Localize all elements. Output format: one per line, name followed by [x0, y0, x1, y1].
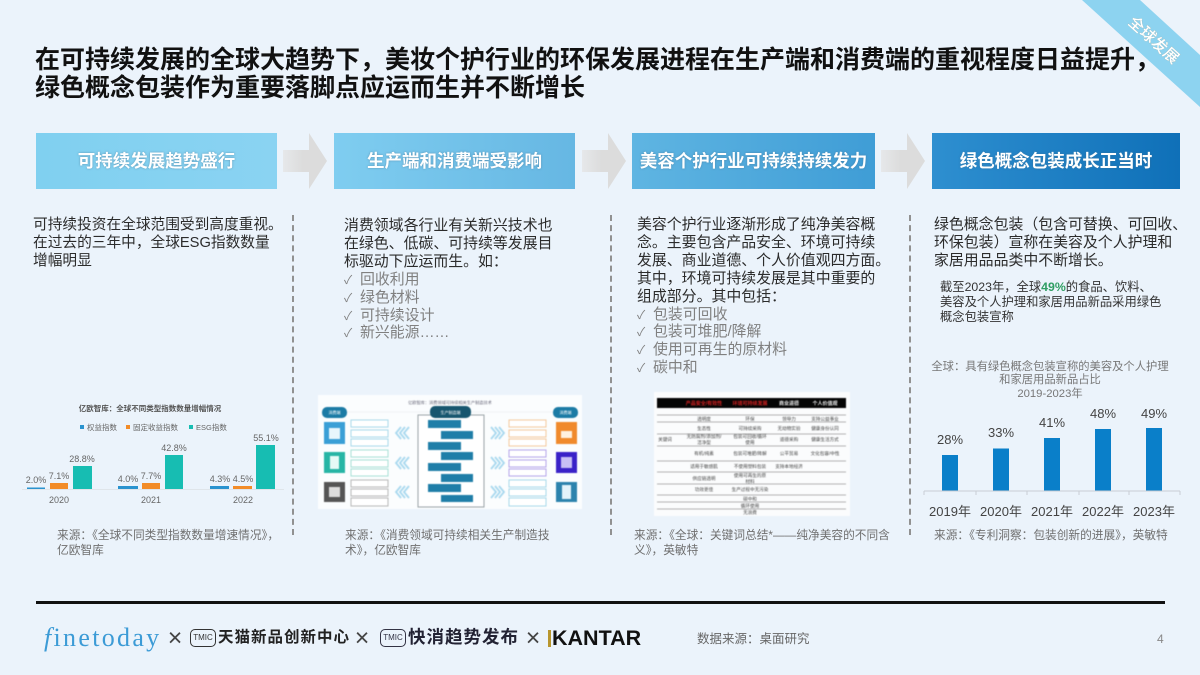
text: 49% [1141, 406, 1167, 421]
column 4 bar chart: 2020年 [980, 504, 1022, 519]
column 4 bar chart: 2019年 [929, 504, 971, 519]
column 1 chart: index growth: 4.3% [210, 474, 230, 484]
arrow 2 [582, 133, 626, 189]
column 4 highlight text: 美容及个人护理和家居用品新品采用绿色 [940, 295, 1161, 309]
column 2 diagram: 亿欧智库：消费领域可持续相关生产制造技术 [408, 399, 493, 406]
logo: TMIC new product center: TMIC [193, 633, 213, 642]
step header 2 [334, 133, 575, 189]
column 4 bar chart: 33% [988, 425, 1014, 440]
column 3 text: 碳中和 [653, 360, 698, 376]
logo text: 快消趋势发布: 快消趋势发布 [408, 627, 519, 647]
column 3 table: 个人价值观 [812, 400, 838, 407]
column 3 text: ✓ [637, 361, 645, 375]
column 1 chart: index growth: 7.7% [141, 471, 161, 481]
column 1 chart: index growth [22, 403, 284, 505]
column 4 source: 来源：《专利洞察：包装创新的进展》，英敏特 [934, 529, 1168, 542]
step header 4 [932, 133, 1180, 189]
separator x two: × [355, 624, 369, 652]
text: 48% [1090, 406, 1116, 421]
column 3 table: 公平贸易 [780, 450, 799, 457]
column 4 highlight text: 截至2023年，全球49%的食品、饮料、 [940, 280, 1152, 294]
title [35, 46, 1160, 102]
column 3 table: 循环使用 [741, 502, 760, 510]
right icons [556, 422, 577, 444]
column 3 text: ✓ [637, 308, 645, 322]
logo: TMIC fmcg [380, 629, 406, 647]
column 3 text: 发展、商业道德、个人价值观四方面。 [637, 253, 890, 269]
column 3 table: 生态性 [697, 425, 711, 432]
column 2 source: 术》，亿欧智库 [345, 544, 421, 556]
column 3 source: 义》，英敏特 [634, 544, 698, 556]
column 3 table: 功效更佳 [695, 486, 714, 493]
column 3 table: 可持续采购 [739, 425, 762, 432]
text: 41% [1039, 415, 1065, 430]
column 3 table: 包装可回收/循环 [733, 433, 767, 440]
corner ribbon: 全球发展 [1082, 0, 1200, 107]
column 3 text: 念。主要包含产品安全、环境可持续 [637, 235, 875, 251]
column 2 text: ✓ [344, 309, 352, 323]
logo: KANTAR: KANTAR [552, 626, 641, 650]
step header 1: 可持续发展趋势盛行 [78, 151, 235, 171]
column 1 chart: index growth: 2021 [141, 495, 161, 505]
column 1 text [33, 216, 283, 269]
column 4 chart title: 和家居用品新品占比 [999, 374, 1101, 386]
column 1 chart: index growth: 4.5% [233, 474, 253, 484]
column 1 chart: index growth: 28.8% [69, 454, 95, 464]
data source: 数据来源：桌面研究 [697, 632, 810, 646]
column 1 chart: index growth: 2022 [233, 495, 253, 505]
column 3 table: 碳中和 [743, 496, 757, 502]
list boxes [351, 420, 546, 506]
column 3 text: 组成部分。其中包括： [637, 289, 786, 305]
chevrons [396, 427, 504, 498]
column 4 bar chart: 2021年 [1031, 504, 1073, 519]
column 2 diagram: 消费端 [328, 409, 340, 415]
column 4 text: 环保包装）宣称在美容及个人护理和 [934, 235, 1172, 251]
column 4 bar chart: 2023年 [1133, 504, 1175, 519]
column 3 table: 使用 [745, 439, 755, 446]
column 1 text: 可持续投资在全球范围受到高度重视。 [33, 217, 283, 233]
arrow 3 [881, 133, 925, 189]
title: 绿色概念包装作为重要落脚点应运而生并不断增长 [35, 74, 585, 102]
logo text: 天猫新品创新中心: 天猫新品创新中心 [218, 629, 350, 646]
column 3 table: 健康身份认同 [811, 425, 839, 432]
column 2 text: 消费领域各行业有关新兴技术也 [344, 218, 552, 234]
step header 1 [36, 133, 277, 189]
column 3 table: 文化包容/中性 [811, 450, 840, 457]
column 1 chart: index growth: 固定收益指数 [133, 422, 178, 432]
column 2 source: 来源：《消费领域可持续相关生产制造技 [345, 529, 550, 542]
column 1 chart: index growth: 55.1% [253, 433, 279, 443]
left icons [324, 422, 345, 444]
column 3 table: 无浪费 [743, 509, 757, 516]
column 4 text [934, 216, 1187, 269]
arrow 1 [283, 133, 327, 189]
column 2 diagram [318, 395, 582, 509]
separator x: × [168, 624, 182, 652]
step header 2: 生产端和消费端受影响 [367, 151, 542, 171]
separator x three: × [526, 624, 540, 652]
column 3 table: 环境可持续发展 [732, 400, 768, 407]
column 1 text: 在过去的三年中，全球ESG指数数量 [33, 235, 270, 251]
column 3 table: 洁净型 [697, 439, 711, 446]
column 3 text [637, 216, 890, 376]
column 4 chart title: 2019-2023年 [1017, 388, 1083, 400]
column 2 text: 可持续设计 [360, 308, 434, 324]
column 1 source [57, 528, 279, 556]
column 4 text: 绿色概念包装（包含可替换、可回收、 [934, 217, 1187, 233]
column 1 source: 来源：《全球不同类型指数数量增速情况》， [57, 529, 279, 542]
column 1 chart: index growth: 7.1% [49, 471, 69, 481]
column 4 chart title [931, 360, 1169, 400]
column 3 source: 来源：《全球：关键词总结*——纯净美容的不同含 [634, 529, 890, 542]
column 3 table: 无动物实验 [778, 425, 801, 432]
step header 3 [632, 133, 875, 189]
column 3 text: 包装可回收 [653, 307, 727, 323]
column 3 table: 材料 [745, 478, 755, 485]
column 3 table: 透明度 [697, 416, 711, 422]
column 3 table: 产品安全/有效性 [686, 400, 722, 407]
column 3 table: 生产过程中无污染 [732, 486, 769, 493]
column 1 chart: index growth: 42.8% [161, 443, 187, 453]
column 2 diagram: 生产制造端 [440, 409, 460, 415]
footer logos [44, 623, 641, 652]
column 3 text: ✓ [637, 325, 645, 339]
column 2 text: ✓ [344, 291, 352, 305]
column 3 text: 其中，环境可持续发展是其中重要的 [637, 271, 875, 287]
column 3 table: 有机/纯素 [694, 450, 714, 457]
page number: 4 [1157, 632, 1164, 646]
column 3 table: 不使用塑料包装 [734, 463, 766, 470]
column 3 table: 适用于敏感肌 [690, 463, 718, 470]
column 2 text: ✓ [344, 326, 352, 340]
column 2 text: 回收利用 [360, 272, 420, 288]
column 1 text: 增幅明显 [33, 253, 92, 269]
column 4 highlight text: 概念包装宣称 [940, 310, 1014, 324]
center box [418, 415, 484, 507]
column 3 source [634, 528, 890, 556]
column 1 chart: index growth: 2.0% [26, 475, 46, 485]
column 1 source: 亿欧智库 [57, 544, 104, 556]
column 4 text: 家居用品品类中不断增长。 [934, 253, 1113, 269]
column 1 chart: index growth: 权益指数 [87, 422, 117, 432]
column 2 text [344, 217, 552, 341]
column 4 highlight text [940, 280, 1161, 324]
column 3 table: 商业道德 [779, 400, 799, 407]
column 2 text: 新兴能源…… [360, 325, 449, 341]
column 3 text: 包装可堆肥/降解 [653, 324, 761, 340]
column 3 table: 健康生活方式 [811, 436, 839, 443]
step header 4: 绿色概念包装成长正当时 [960, 151, 1152, 171]
column 1 chart: index growth: 亿欧智库：全球不同类型指数数量增幅情况 [79, 403, 222, 413]
column 3 table: 使用可再生的原 [734, 472, 766, 479]
column 3 text: 美容个护行业逐渐形成了纯净美容概 [637, 217, 875, 233]
logo: TMIC new product center [190, 629, 216, 647]
column 4 bar chart [924, 406, 1180, 519]
logo: finetoday: finetoday [44, 623, 161, 652]
column 1 chart: index growth: 2020 [49, 495, 69, 505]
column 4 bar chart: 28% [937, 432, 963, 447]
step header 3: 美容个护行业可持续持续发力 [640, 151, 867, 171]
column 1 chart: index growth: 4.0% [118, 474, 138, 484]
column 2 diagram: 消费端 [560, 409, 572, 415]
corner ribbon: 全球发展: 全球发展 [1125, 12, 1184, 68]
column 2 text: 在绿色、低碳、可持续等发展目 [344, 236, 552, 252]
column 2 text: ✓ [344, 273, 352, 287]
column 3 table: 领导力 [782, 416, 796, 422]
column 3 table: 支持公益事业 [811, 416, 839, 422]
column 2 text: 标驱动下应运而生。如： [344, 254, 508, 270]
title: 在可持续发展的全球大趋势下，美妆个护行业的环保发展进程在生产端和消费端的重视程度日益提升， [35, 46, 1160, 74]
column 3 table: 关键词 [658, 436, 672, 443]
logo: TMIC fmcg: TMIC [383, 633, 403, 642]
column 3 table: 环保 [745, 416, 755, 422]
column 3 table: 包装可堆肥/降解 [733, 450, 767, 457]
column 4 chart title: 全球：具有绿色概念包装宣称的美容及个人护理 [931, 361, 1169, 373]
column 3 table: 无防腐剂/添加剂/ [687, 433, 722, 440]
column 3 table: 供应链透明 [693, 475, 716, 482]
column 2 text: 绿色材料 [360, 290, 420, 306]
column 2 source [345, 528, 550, 556]
column 3 text: ✓ [637, 343, 645, 357]
column 3 table: 道德采购 [780, 436, 799, 443]
column 3 table [654, 392, 850, 516]
column 4 bar chart: 2022年 [1082, 504, 1124, 519]
column 1 chart: index growth: ESG指数 [196, 422, 227, 432]
column 3 table: 支持本地经济 [775, 463, 803, 470]
column 3 text: 使用可再生的原材料 [653, 342, 787, 358]
